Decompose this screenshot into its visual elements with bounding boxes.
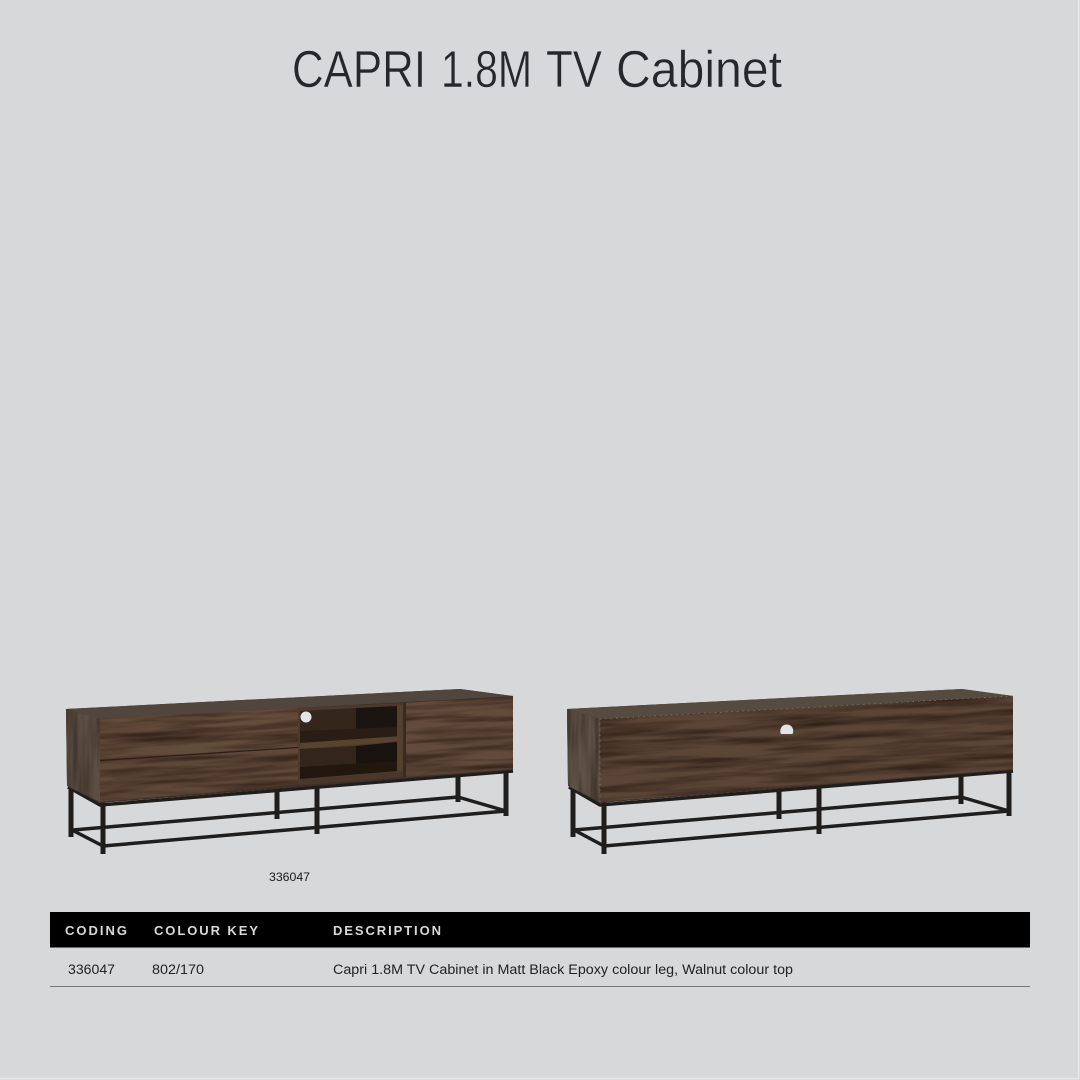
top drawer	[100, 708, 298, 760]
bottom drawer	[100, 748, 298, 802]
table header bar: CODING	[65, 923, 127, 938]
table header bar: COLOUR KEY	[154, 923, 258, 938]
cable hole	[300, 712, 312, 722]
table header bar: DESCRIPTION	[333, 923, 441, 938]
product image: front view of cabinet	[66, 689, 514, 854]
right door	[406, 697, 513, 777]
table	[50, 912, 1030, 986]
title	[292, 41, 783, 99]
cabinet top surface	[567, 689, 1013, 719]
table header bar	[50, 912, 1030, 948]
cabinet base silhouette	[66, 689, 513, 803]
table row: Capri 1.8M TV Cabinet in Matt Black Epoxy colour leg, Walnut colour top	[333, 962, 793, 977]
open shelf compartment	[298, 703, 406, 785]
cabinet base silhouette	[567, 689, 1013, 803]
title: TV	[546, 41, 602, 99]
table row: 802/170	[152, 962, 204, 977]
back panel	[600, 696, 1013, 802]
metal leg frame (front view)	[68, 770, 513, 854]
product code label: 336047	[269, 870, 310, 884]
product image: back view of cabinet	[567, 689, 1014, 854]
title: 1.8M	[441, 41, 532, 99]
title: CAPRI	[292, 41, 426, 99]
cabinet top surface	[66, 689, 513, 719]
metal leg frame (back view)	[569, 770, 1013, 854]
table row	[50, 962, 1030, 986]
table row: 336047	[68, 962, 115, 977]
cabinet side panel	[66, 710, 100, 802]
cable cut-out	[780, 724, 793, 734]
back panel edge	[600, 696, 1013, 802]
drawer gap line	[100, 748, 298, 760]
cabinet side panel	[567, 709, 600, 802]
title: Cabinet	[616, 41, 783, 99]
